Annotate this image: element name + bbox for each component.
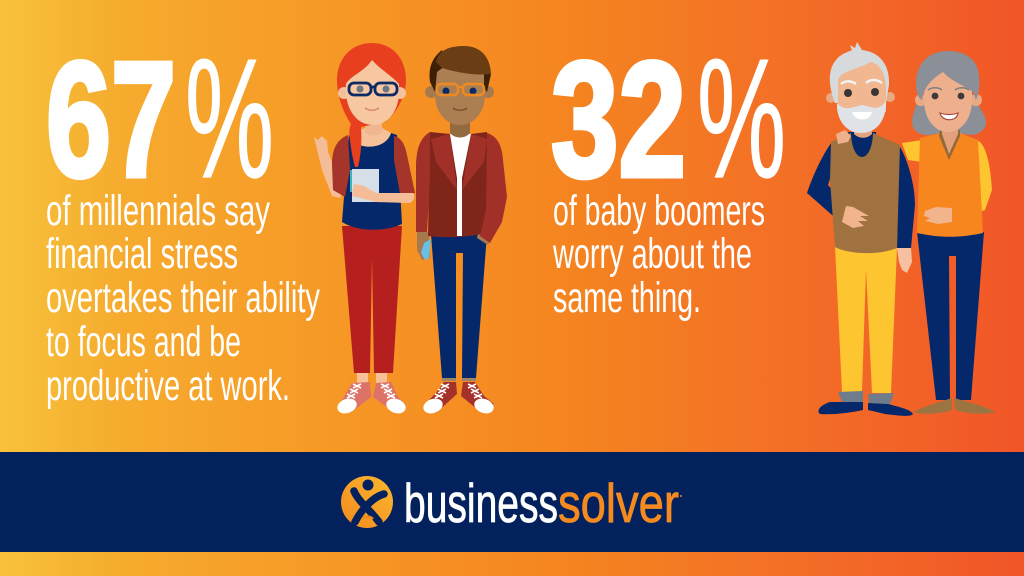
wordmark: business bbox=[404, 472, 558, 534]
face bbox=[838, 62, 886, 112]
cuffs bbox=[442, 378, 476, 381]
statistic panel: millennials bbox=[46, 24, 320, 410]
eyes bbox=[844, 89, 852, 97]
big number 32%: 32 bbox=[551, 28, 686, 211]
right shoe bbox=[461, 382, 496, 416]
description: millennials: to focus and be bbox=[46, 318, 241, 366]
hair top bbox=[436, 46, 491, 75]
smile bbox=[453, 108, 467, 110]
big number 32%: % bbox=[697, 24, 786, 214]
description: millennials: productive at work. bbox=[46, 362, 290, 410]
statistic panel: baby boomers bbox=[551, 24, 786, 322]
eyebrows bbox=[928, 88, 969, 90]
neck bbox=[450, 118, 470, 138]
face bbox=[435, 66, 485, 125]
eyes bbox=[932, 93, 938, 99]
description: millennials: overtakes their ability bbox=[46, 274, 320, 322]
eyes bbox=[356, 86, 364, 92]
white shirt bbox=[450, 134, 471, 236]
forearm holding notebook bbox=[352, 184, 414, 203]
jacket body bbox=[428, 132, 489, 237]
pocket hand bbox=[477, 232, 494, 245]
pants bbox=[431, 234, 487, 378]
ears bbox=[915, 94, 927, 106]
description: baby boomers: worry about the bbox=[552, 230, 752, 278]
back hair bbox=[912, 100, 986, 135]
dark hair side bbox=[430, 50, 445, 92]
cuffs bbox=[838, 391, 894, 404]
description: baby boomers: same thing. bbox=[553, 274, 701, 322]
pants bbox=[342, 226, 402, 373]
hair bbox=[830, 42, 889, 103]
ears bbox=[425, 86, 437, 98]
hand at side bbox=[897, 248, 912, 273]
right arm bbox=[897, 145, 915, 248]
left shoe bbox=[335, 382, 371, 416]
hair and braid bbox=[337, 43, 406, 167]
description: millennials: financial stress bbox=[46, 230, 238, 278]
smile bbox=[365, 108, 379, 110]
turtleneck bbox=[848, 132, 876, 158]
vest bbox=[917, 133, 983, 237]
notebook bbox=[350, 169, 379, 202]
wife's hand on shoulder bbox=[836, 130, 851, 144]
shoes bbox=[818, 402, 913, 416]
glasses bbox=[349, 83, 397, 95]
beard bbox=[837, 100, 886, 133]
illustration: millennial woman bbox=[314, 43, 415, 416]
right shoe bbox=[373, 382, 408, 416]
description: millennials: of millennials say bbox=[46, 187, 270, 235]
face bbox=[924, 66, 972, 132]
raised arm bbox=[314, 136, 345, 198]
left arm bbox=[807, 142, 846, 222]
description: baby boomers bbox=[552, 187, 765, 322]
chest skin bbox=[349, 128, 391, 147]
illustration: older woman bbox=[902, 51, 996, 414]
mouth bbox=[852, 112, 872, 120]
ankles bbox=[357, 373, 387, 384]
neck bbox=[365, 120, 382, 136]
description: millennials bbox=[46, 187, 320, 410]
yellow sleeves bbox=[902, 140, 922, 162]
cardigan sleeves bbox=[332, 135, 350, 197]
illustration: older man bbox=[807, 42, 915, 416]
sleeves bbox=[416, 132, 430, 232]
mouth bbox=[940, 113, 958, 120]
tank top bbox=[342, 133, 402, 230]
lapels bbox=[431, 134, 487, 190]
neck bbox=[854, 128, 872, 138]
left shoe bbox=[421, 382, 457, 416]
wordmark: solver bbox=[558, 472, 679, 534]
footer banner bbox=[0, 452, 1024, 552]
hand on belly bbox=[924, 207, 952, 224]
illustration: millennial man bbox=[416, 46, 507, 416]
logo mark bbox=[341, 476, 393, 528]
big number 67%: 67 bbox=[46, 28, 176, 211]
collar bbox=[939, 130, 960, 160]
hair top bbox=[916, 51, 979, 100]
left hand with phone bbox=[417, 232, 430, 260]
face bbox=[346, 60, 399, 125]
big number 67%: % bbox=[185, 24, 274, 214]
vest bbox=[830, 133, 900, 253]
eyes bbox=[442, 88, 450, 94]
ears bbox=[826, 93, 836, 103]
ears bbox=[338, 87, 350, 99]
shoes bbox=[913, 398, 996, 414]
eyebrows bbox=[841, 80, 882, 84]
hand on belly bbox=[842, 206, 869, 228]
pants bbox=[917, 232, 984, 400]
glasses bbox=[437, 84, 484, 95]
description: baby boomers: of baby boomers bbox=[553, 187, 765, 235]
pants bbox=[835, 246, 897, 393]
